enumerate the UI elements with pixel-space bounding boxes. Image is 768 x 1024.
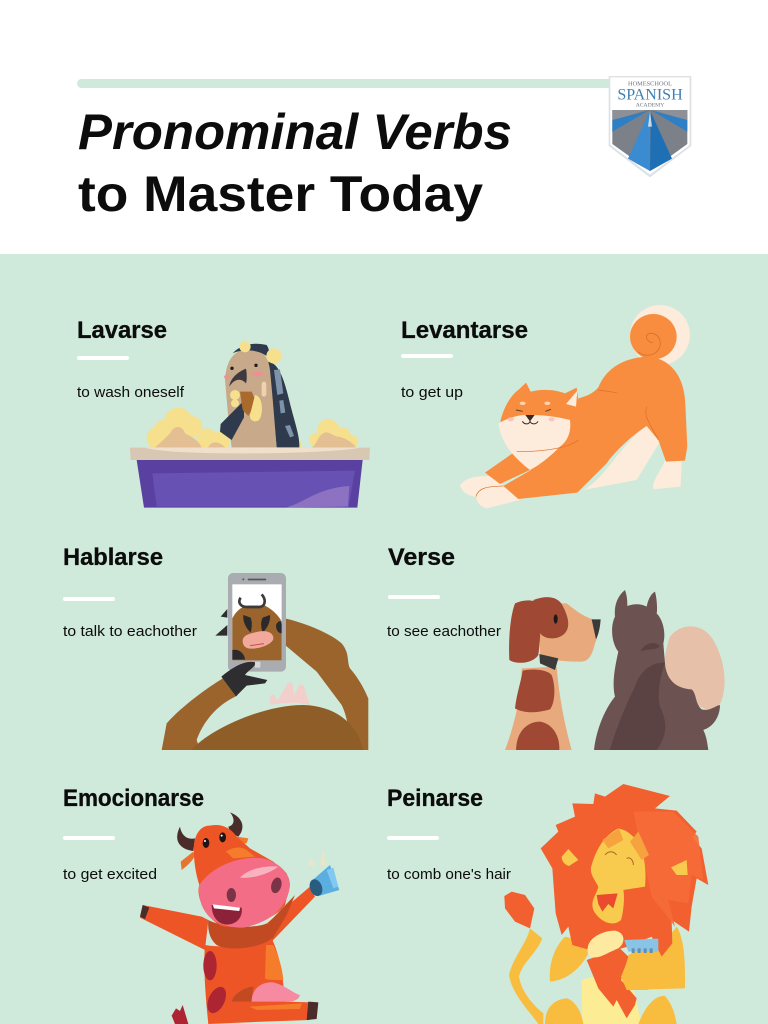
translation: to see eachother: to see eachother: [387, 624, 501, 640]
translation: to wash oneself: to wash oneself: [77, 385, 185, 401]
divider: Hablarse: [63, 597, 115, 601]
logo: Homeschool Spanish Academy shield: ACADEMY: [636, 103, 664, 109]
divider: Emocionarse: [63, 836, 115, 840]
divider: Levantarse: [401, 354, 453, 358]
translation: to get up: to get up: [401, 385, 463, 401]
illustration: excited red cow with mug: [140, 812, 339, 1024]
title: [78, 104, 512, 222]
divider: Lavarse: [77, 356, 129, 360]
translation: to talk to eachother: to talk to eachother: [63, 624, 197, 640]
illustration: lion combing its mane: [504, 784, 708, 1024]
heading: Verse: Verse: [388, 544, 455, 571]
logo: Homeschool Spanish Academy shield: HOMESCHOOL: [628, 81, 672, 88]
heading: Levantarse: Levantarse: [401, 317, 528, 344]
divider: Verse: [388, 595, 440, 599]
title: to Master Today: [78, 166, 483, 222]
illustration: penguin in bathtub: [130, 341, 370, 508]
illustration: cow taking a selfie: [162, 573, 368, 750]
heading: Lavarse: Lavarse: [77, 317, 167, 344]
illustration: two dogs facing each other: [505, 590, 725, 750]
logo: Homeschool Spanish Academy shield: SPANISH: [617, 86, 683, 103]
title accent bar: [77, 79, 622, 88]
illustration: stretching shiba dog: [460, 305, 690, 508]
logo: Homeschool Spanish Academy shield: [609, 76, 691, 177]
title: Pronominal Verbs: [78, 104, 512, 160]
heading: Peinarse: Peinarse: [387, 785, 483, 812]
translation: to get excited: to get excited: [63, 867, 157, 883]
divider: Peinarse: [387, 836, 439, 840]
panel: green background: [0, 254, 768, 1024]
heading: Emocionarse: Emocionarse: [63, 785, 204, 812]
translation: to comb one's hair: to comb one's hair: [387, 867, 511, 883]
heading: Hablarse: Hablarse: [63, 544, 163, 571]
